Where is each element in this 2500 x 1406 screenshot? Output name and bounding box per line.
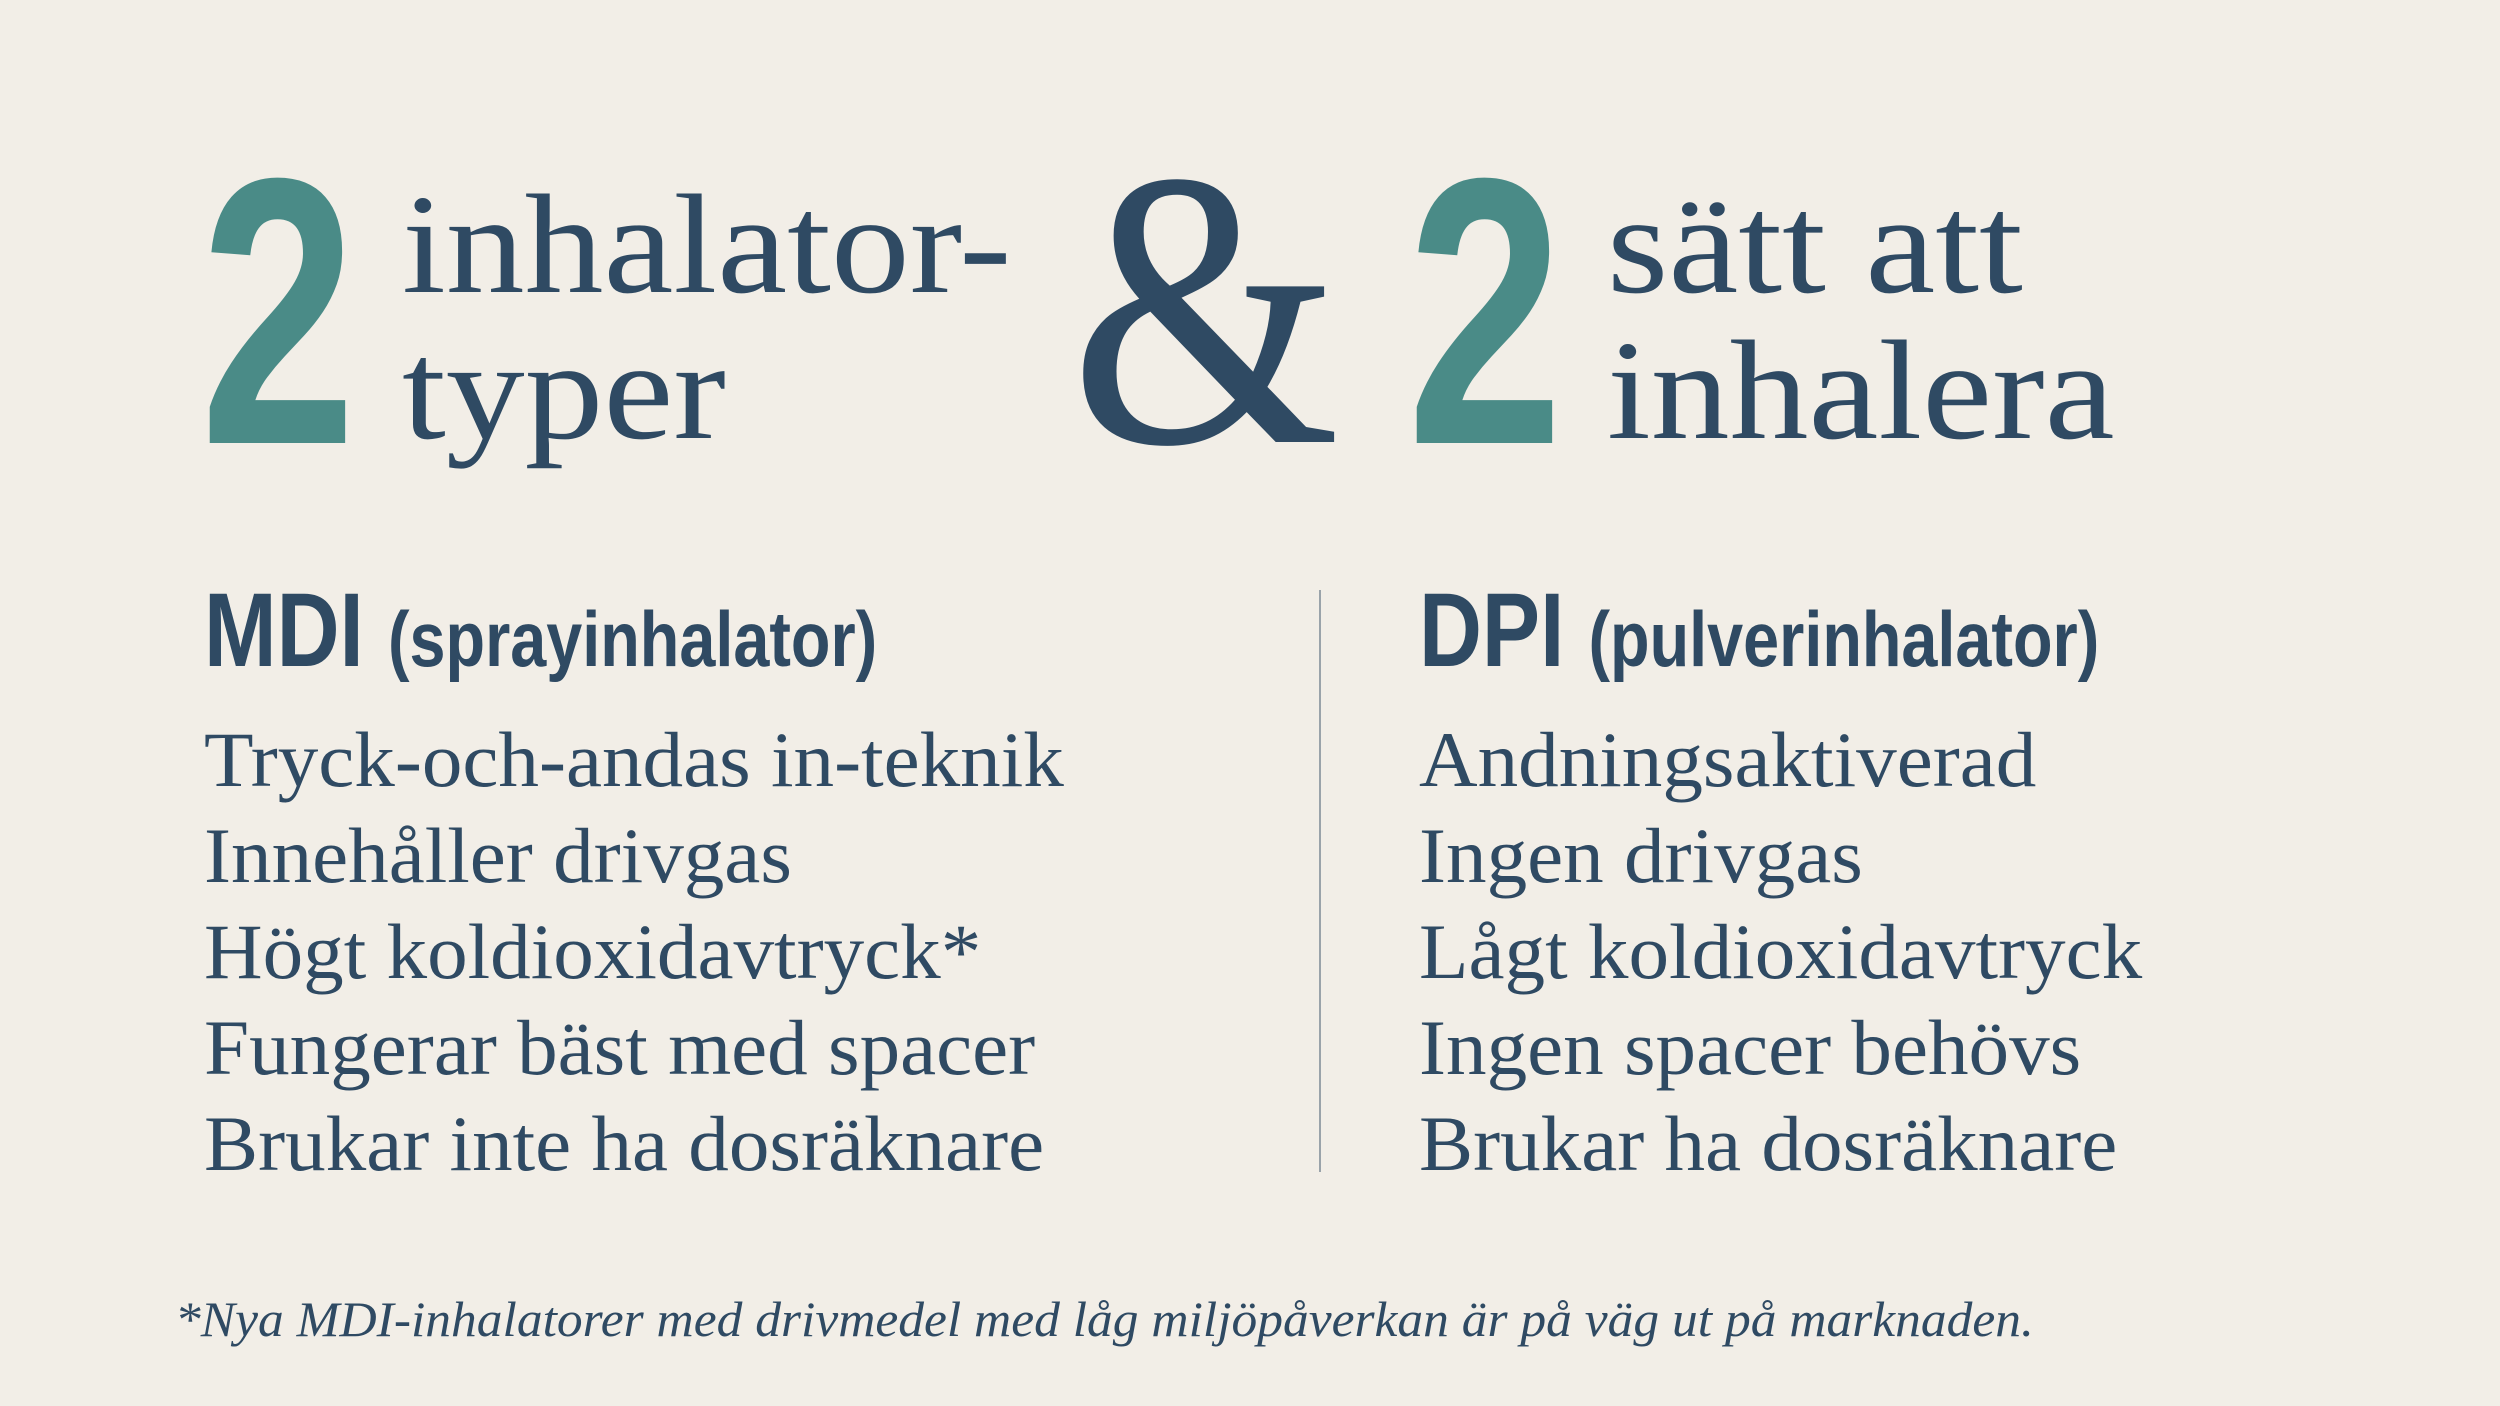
list: DPI properties: Lågt koldioxidavtryck: [1419, 908, 2142, 995]
heading: DPI: DPI (pulverinhalator): [1419, 572, 2099, 689]
list: DPI properties: Ingen drivgas: [1419, 812, 1863, 899]
title: inhalatortyper: typer: [402, 311, 726, 469]
title: ampersand: &: [1070, 91, 1340, 528]
list: MDI properties: Fungerar bäst med spacer: [204, 1004, 1035, 1091]
footnote: *Nya MDI-inhalatorer med drivmedel med låg miljöpåverkan är på väg ut på marknaden.: [175, 1291, 2034, 1347]
list: MDI properties: [204, 716, 1064, 1187]
title: big number 2 right: 2: [1407, 99, 1563, 524]
list: MDI properties: Högt koldioxidavtryck*: [204, 908, 981, 995]
list: DPI properties: Brukar ha dosräknare: [1419, 1100, 2117, 1187]
title: sätt att inhalera: inhalera: [1607, 311, 2115, 469]
title: big number 2 left: 2: [200, 99, 356, 524]
list: MDI properties: Tryck-och-andas in-teknik: [204, 716, 1064, 803]
divider: [1319, 590, 1321, 1172]
heading: MDI: MDI (sprayinhalator): [204, 572, 877, 689]
list: MDI properties: Brukar inte ha dosräknare: [204, 1100, 1044, 1187]
list: DPI properties: Ingen spacer behövs: [1419, 1004, 2081, 1091]
list: DPI properties: Andningsaktiverad: [1419, 716, 2036, 803]
title: sätt att inhalera: sätt att: [1607, 165, 2023, 323]
list: DPI properties: [1419, 716, 2142, 1187]
title: inhalatortyper: [402, 165, 1012, 469]
list: MDI properties: Innehåller drivgas: [204, 812, 792, 899]
title: inhalatortyper: inhalator-: [402, 165, 1012, 323]
title: sätt att inhalera: [1607, 165, 2115, 469]
